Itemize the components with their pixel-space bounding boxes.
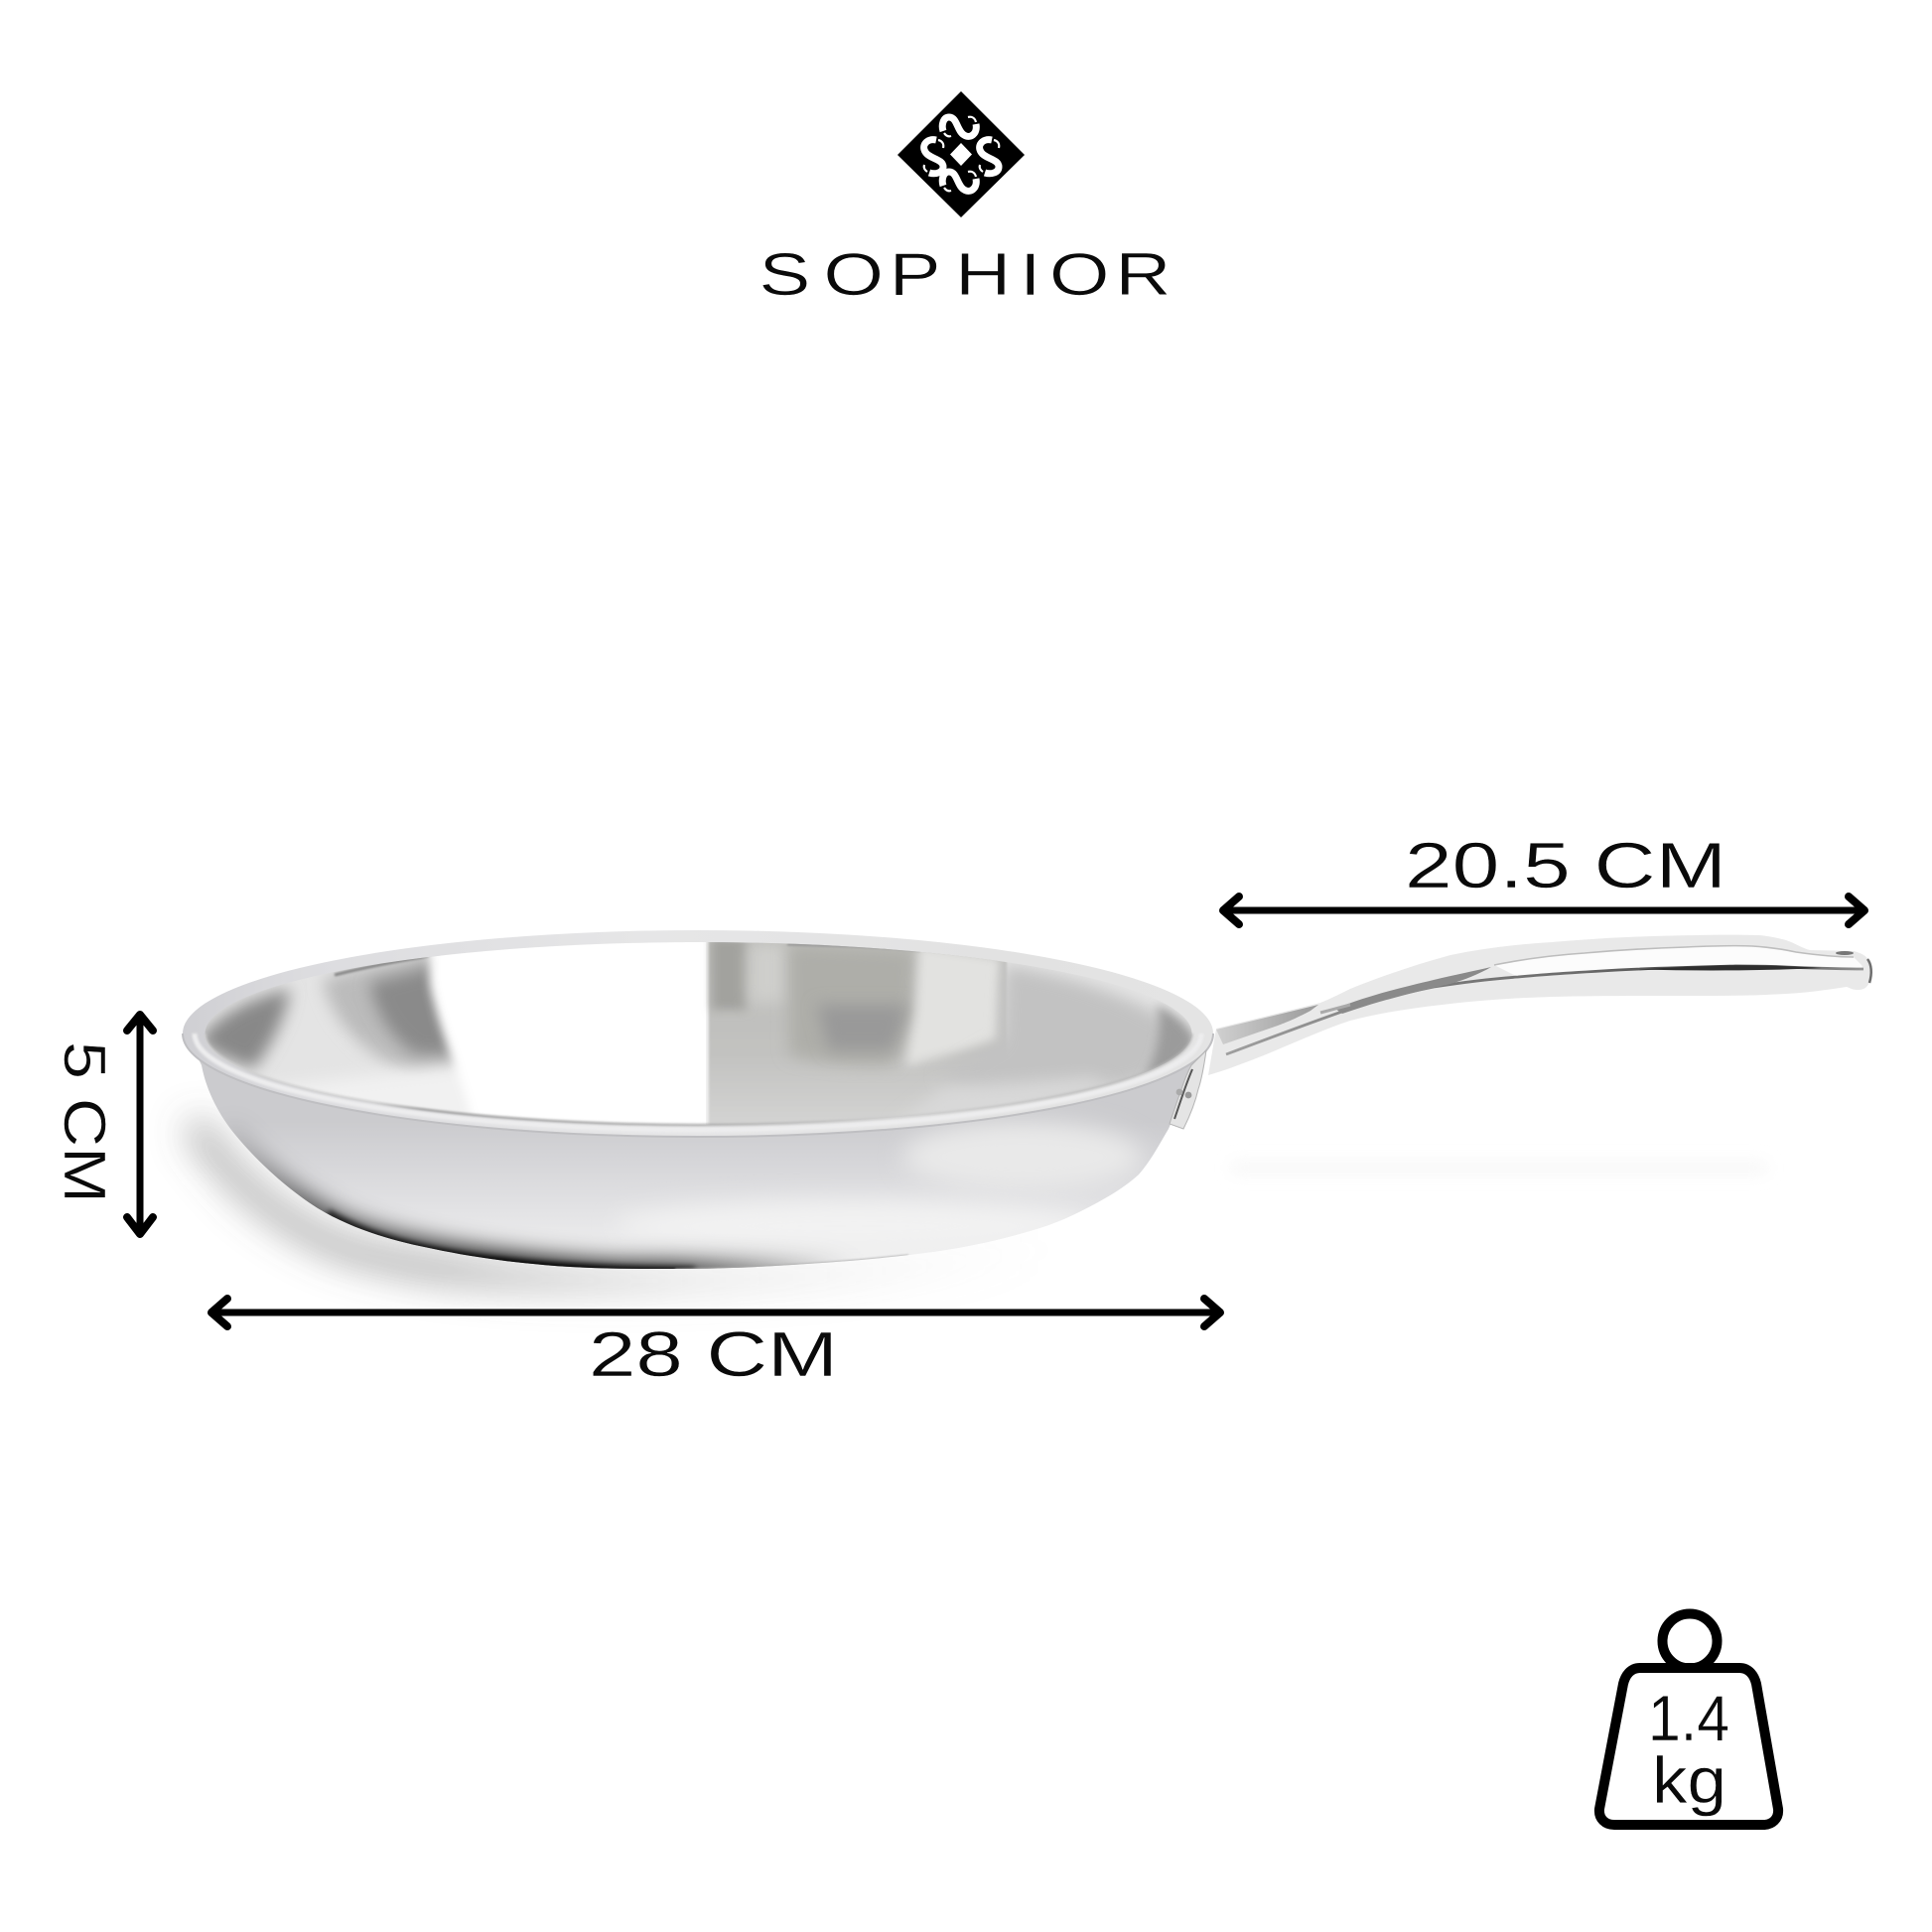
label: 28 CM: 28 CM [589,1318,838,1390]
ground shadow [194,1122,1767,1281]
logo [759,91,1172,308]
lower left soft white [306,1058,468,1112]
pan outer body [200,1060,1192,1269]
arrow: handle length [1223,897,1864,924]
logo mark: diamond with S knots [897,91,1025,217]
handle groove line [1494,946,1854,965]
handle spine dark line [1226,966,1863,1054]
arrow: pan diameter [211,1299,1220,1326]
dimension: pan height [52,1015,153,1234]
weight ring [1662,1614,1718,1668]
dimension: handle length [1223,829,1864,924]
right reflection grey floor [709,938,1007,1129]
brand name: SOPHIOR [759,241,1172,308]
left reflection soft grey [323,951,465,1074]
pan rim [183,930,1213,1137]
pan handle [1208,935,1871,1075]
pan interior [205,942,1193,1128]
label: 20.5 CM: 20.5 CM [1405,829,1726,901]
white reflection [430,933,706,1132]
weight value: 1.4 [1648,1682,1729,1754]
label: 5 CM: 5 CM [52,1041,117,1203]
inner rim line [205,1034,1191,1125]
handle bright stripe [1494,946,1863,977]
weight icon [1599,1614,1778,1825]
handle neck wedge [1216,1005,1318,1044]
handle end cap [1867,959,1871,983]
arrow: pan height [127,1015,153,1234]
weight body [1599,1668,1778,1825]
handle rivet bracket [1170,1050,1206,1129]
pan photo [183,928,1871,1281]
weight unit: kg [1652,1743,1726,1817]
handle upper groove [1335,967,1491,1014]
dimension: pan diameter [211,1299,1220,1390]
left inner shadow [199,989,290,1068]
